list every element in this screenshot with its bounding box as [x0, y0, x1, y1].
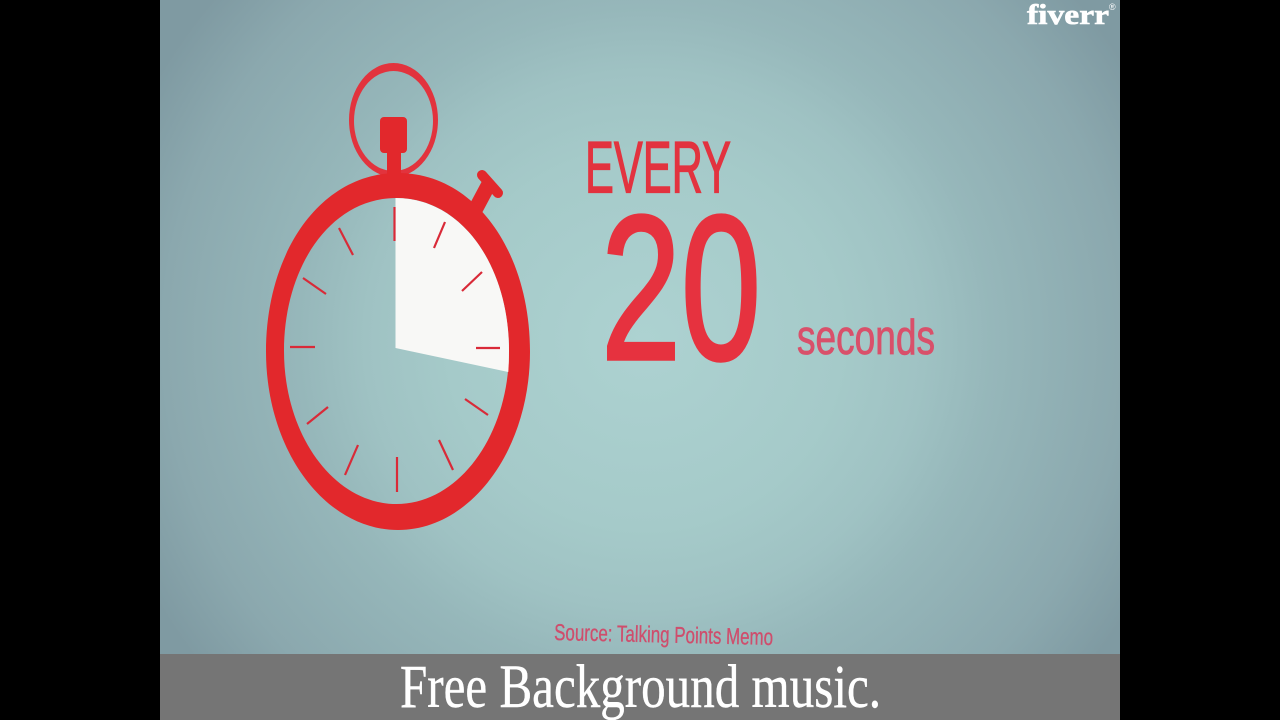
source credit: Source: Talking Points Memo [554, 619, 773, 650]
caption bar [160, 654, 1120, 720]
stopwatch tick marks [290, 207, 500, 492]
white elapsed time wedge [396, 198, 509, 372]
logo: fiverr: ® [1109, 2, 1116, 12]
stopwatch body ring [266, 173, 530, 530]
icon: stopwatch [266, 63, 530, 530]
big number: 20: 20 [601, 173, 761, 403]
unit label: seconds: seconds [797, 311, 935, 365]
caption text: Free Background music. [400, 654, 881, 720]
logo: fiverr: fiverr [1027, 0, 1109, 31]
heading: EVERY: EVERY [585, 128, 731, 208]
video background panel [160, 0, 1120, 654]
stopwatch side button [474, 175, 498, 212]
stopwatch crown knob [380, 117, 407, 180]
stopwatch hanging ring [349, 63, 438, 177]
